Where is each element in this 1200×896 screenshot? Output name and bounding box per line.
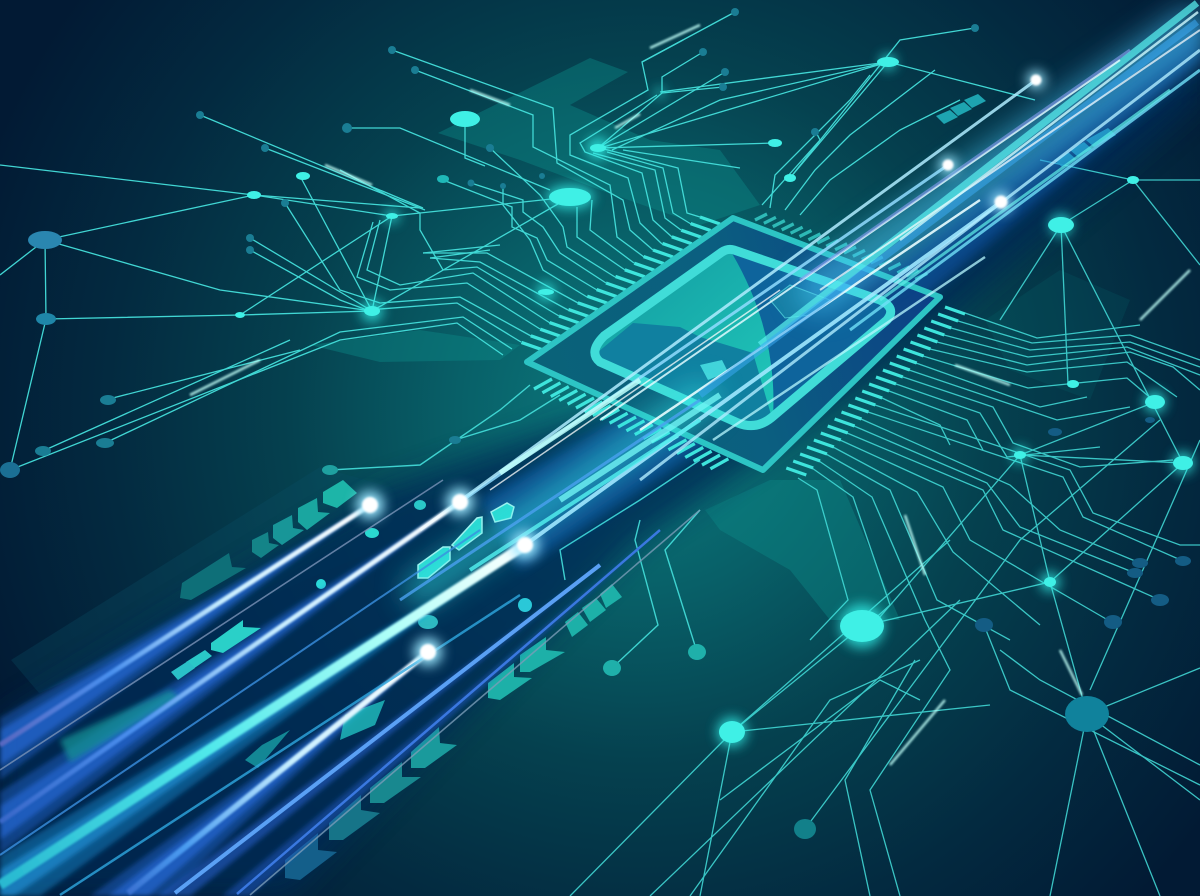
chip core blue facet xyxy=(730,250,891,417)
beam 3 tube xyxy=(0,545,525,896)
beam head glows xyxy=(356,71,1045,666)
light beams: glow layer xyxy=(0,502,660,896)
circuit traces: right xyxy=(570,160,1200,896)
chip core outline xyxy=(595,249,891,426)
chevron arrows: upper right xyxy=(936,94,1116,167)
chevron arrows: lower middle xyxy=(488,584,622,700)
chip body xyxy=(527,218,940,470)
beams in lower left xyxy=(0,400,700,895)
beam 2 tube xyxy=(0,502,460,854)
beam 4 tube xyxy=(90,652,428,896)
chip core lower-left shadow xyxy=(598,323,772,426)
light band through the chip xyxy=(480,20,1200,570)
background map shapes xyxy=(310,58,1130,620)
chevron arrows: bottom xyxy=(285,727,457,880)
nodes: bright xyxy=(235,57,1193,743)
chip core bright patch xyxy=(700,360,728,380)
nodes: glow halos xyxy=(361,54,1194,747)
chip core small detail xyxy=(770,285,830,318)
beams through the chip xyxy=(420,3,1200,545)
bright cores xyxy=(362,74,1042,660)
chevron arrows: top set beside first beam xyxy=(180,480,357,600)
beam cyan glow near chip xyxy=(420,30,1190,590)
chip core fill xyxy=(595,249,891,426)
circuit traces: upper left xyxy=(0,12,1035,470)
chip package xyxy=(521,214,965,475)
glow halos xyxy=(356,71,1045,666)
chevron arrows: between beams xyxy=(60,503,514,768)
chip pins xyxy=(521,214,965,475)
beam 6 tube xyxy=(222,530,660,896)
beam 5 tube xyxy=(158,565,600,896)
faint arrow band lower left xyxy=(11,467,470,693)
glowing diagonal flares xyxy=(190,25,1190,765)
beam 1 tube xyxy=(0,505,370,780)
circuit traces: lower left xyxy=(330,385,700,668)
